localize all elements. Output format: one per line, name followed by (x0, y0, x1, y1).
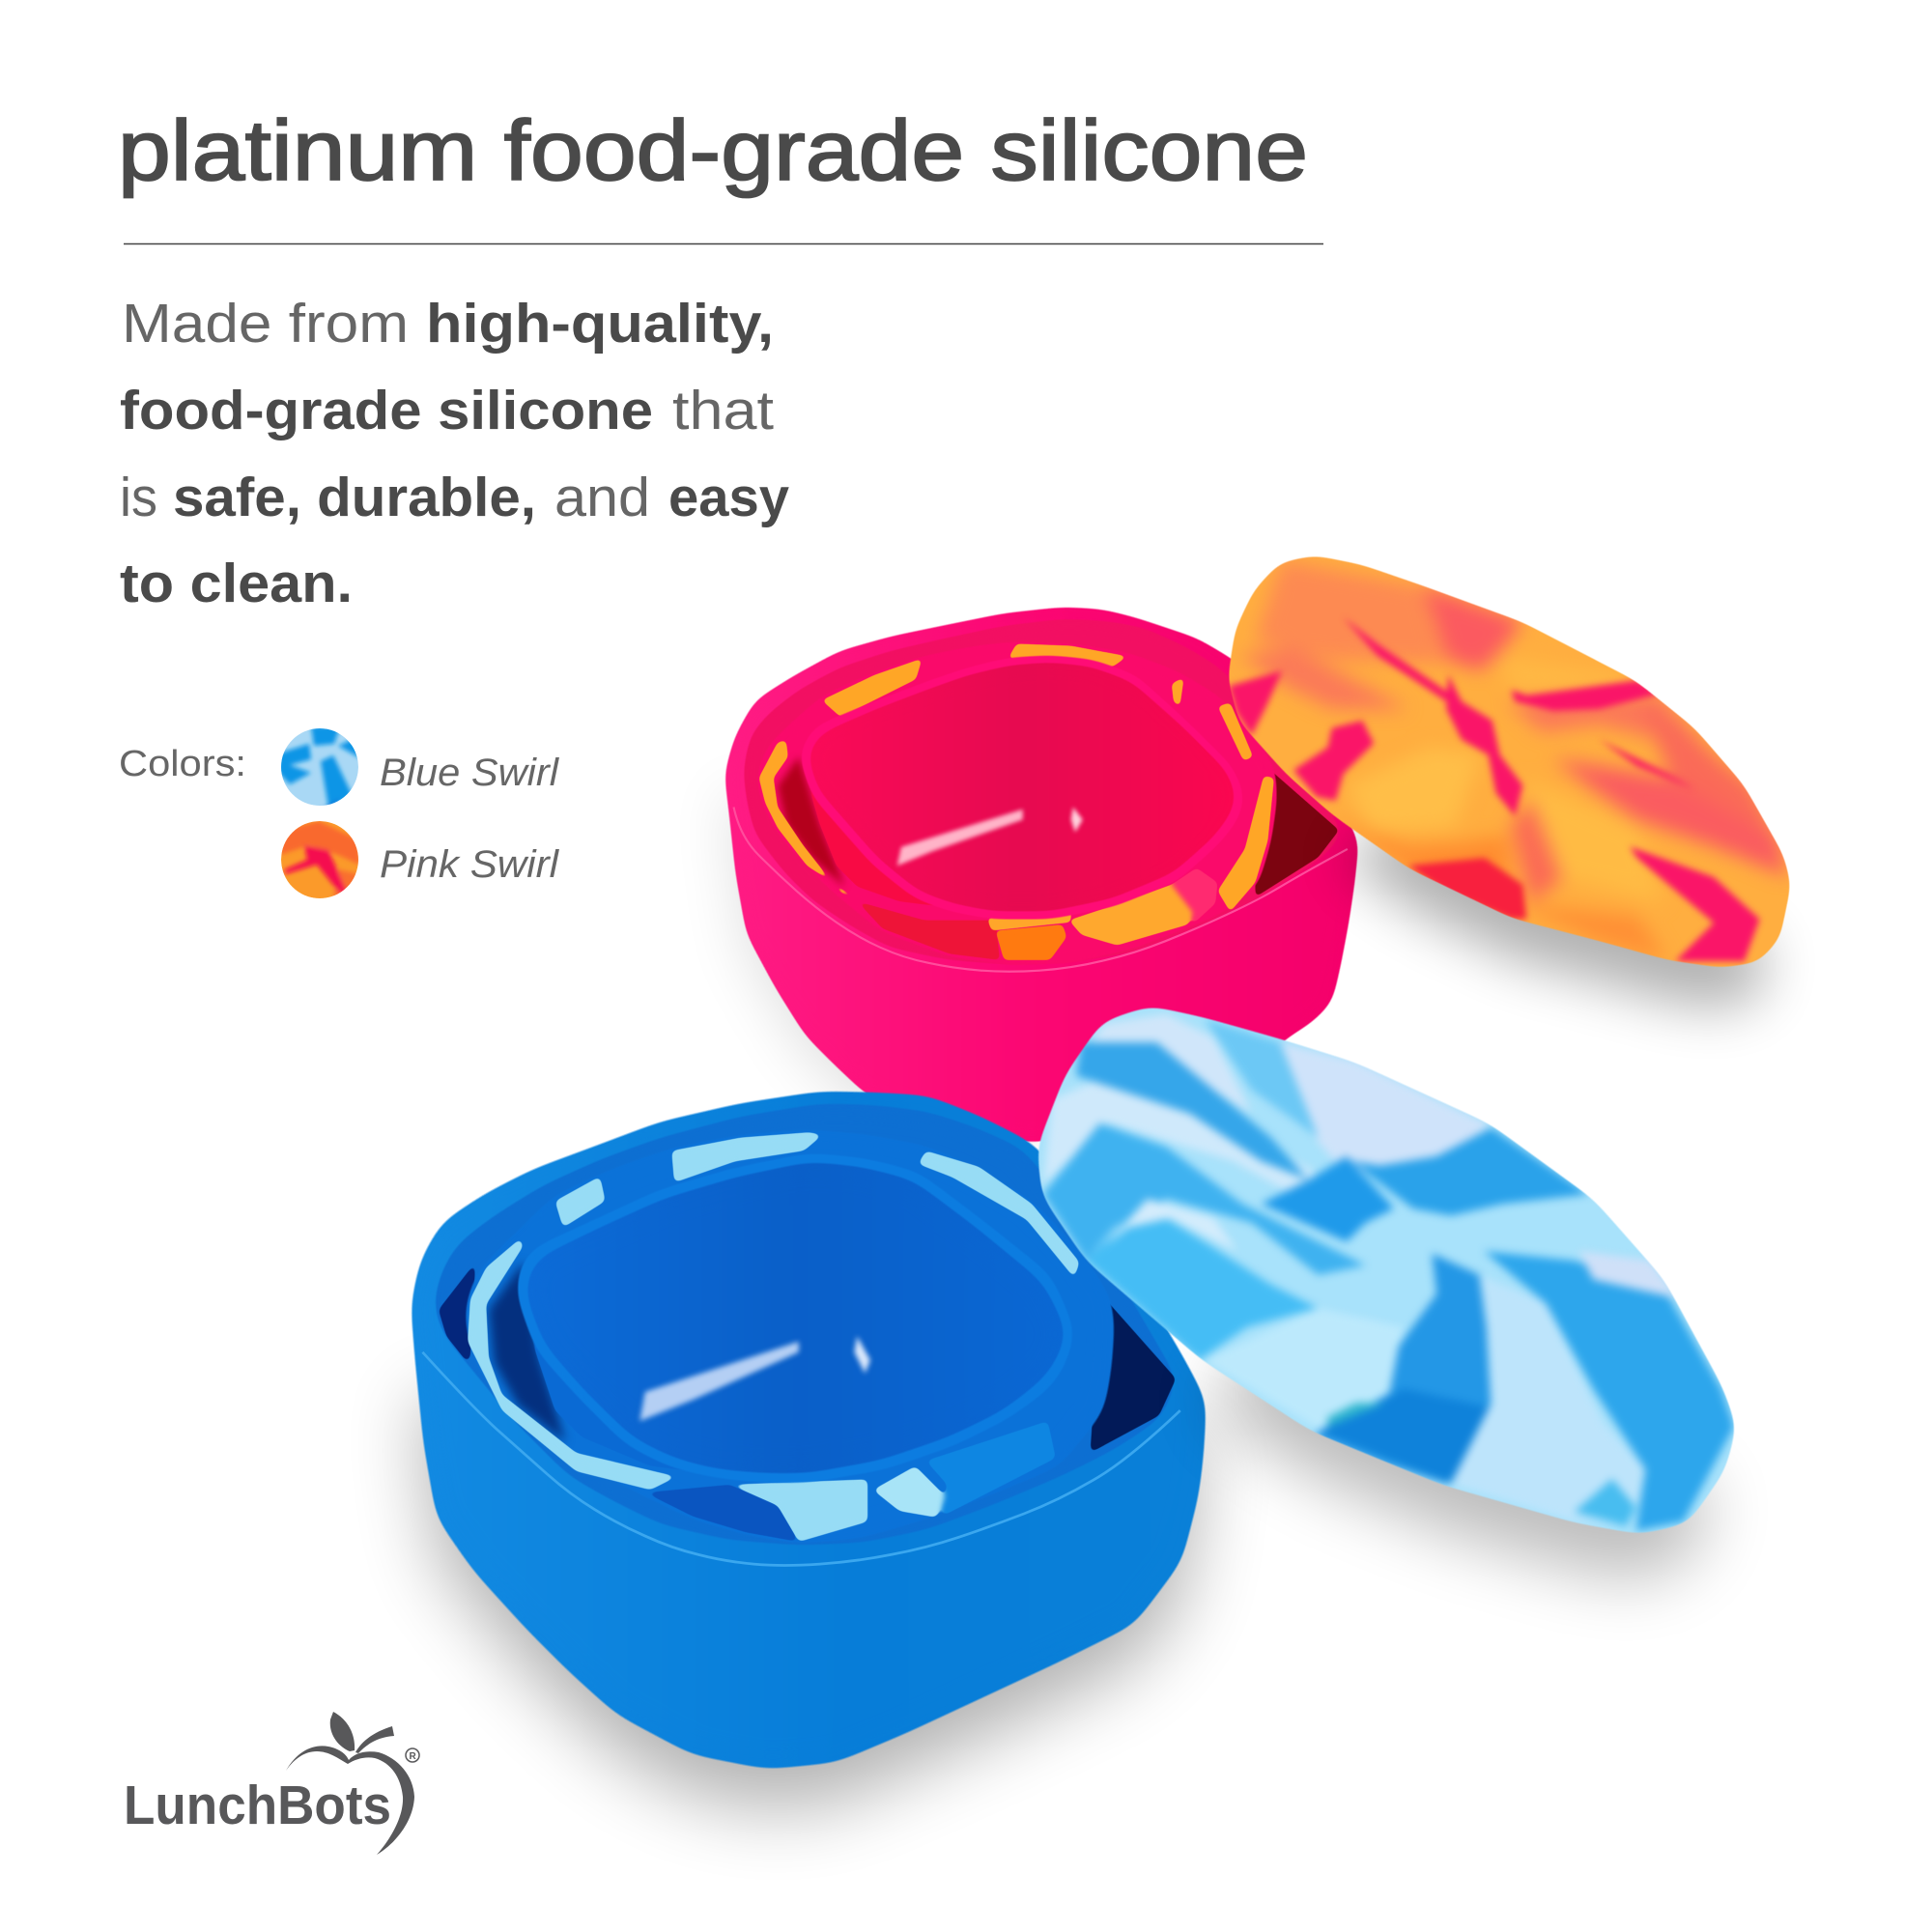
medium bowl left interior shadow (778, 756, 844, 887)
blue box shadow (417, 1389, 1204, 1809)
pink swirl lid group (1217, 549, 1798, 1009)
blue small bowl rim (512, 1149, 1080, 1487)
infographic canvas (120, 117, 1791, 1855)
colors legend (119, 726, 559, 898)
logo wordmark: LunchBots (124, 1775, 391, 1836)
blue outer container (407, 1087, 1210, 1774)
medium bowl base (753, 639, 1280, 968)
title rule (124, 243, 1323, 245)
lid right blue (1484, 1251, 1734, 1531)
line 3 (120, 467, 789, 528)
logo apple outline (286, 1746, 414, 1855)
logo stem (355, 1726, 394, 1753)
pink inner highlight (897, 810, 1023, 866)
lid soft washes (1240, 560, 1789, 961)
pink cavity (740, 615, 1348, 968)
line 3: safe, durable, (173, 467, 536, 528)
pink medium bowl (753, 639, 1280, 968)
colors label: Colors: (119, 744, 246, 784)
logo: LunchBots (124, 1712, 419, 1855)
blue lid swirl (1024, 1000, 1745, 1541)
medium front dark wall (645, 1485, 799, 1542)
pink small bowl rim (796, 652, 1248, 923)
line 2: that (672, 380, 774, 441)
front orange rim (987, 908, 1071, 930)
pink container set (722, 604, 1362, 1157)
swatch: blue swirl (281, 728, 358, 806)
pink small bowl outer wall (805, 774, 950, 908)
medium bowl base (460, 1125, 1119, 1548)
logo leaf (330, 1712, 355, 1751)
light blue swirl patches (468, 1132, 1080, 1542)
line 1: Made from (122, 293, 409, 355)
swatch: pink swirl (280, 821, 359, 898)
medium bowl left interior shadow (489, 1262, 566, 1442)
line 3: and (554, 467, 650, 528)
lid upper right blue (1351, 1128, 1588, 1215)
lid pink streaks (1229, 617, 1759, 961)
blue inner highlight (639, 1342, 799, 1421)
registered mark (406, 1748, 419, 1762)
blue swirl lid group (1024, 1000, 1745, 1579)
swatch label: blue swirl: Blue Swirl (380, 752, 559, 794)
line 2: food-grade silicone (120, 380, 653, 441)
medium bowl front wall (857, 901, 1000, 960)
ribbed tab (926, 1421, 1056, 1517)
pink outer container (722, 604, 1362, 1147)
front orange wall (996, 924, 1066, 960)
registered mark: R (410, 1751, 417, 1762)
lid upper pale (1041, 1079, 1316, 1193)
lid center pale (1205, 1308, 1404, 1432)
lid white wisp (1104, 1199, 1237, 1251)
line 3: easy (668, 467, 789, 528)
lid top light patch (1280, 1042, 1492, 1180)
blue lid shadow (1209, 1327, 1712, 1579)
blue left dark cavity (439, 1262, 475, 1363)
blue small bowl outer wall (524, 1315, 714, 1474)
pink lid shadow (1340, 812, 1767, 1009)
blue small bowl interior (521, 1157, 1071, 1477)
pink inner highlight spot (1071, 808, 1083, 833)
blue container set (407, 1087, 1210, 1809)
pink tab (1068, 867, 1217, 946)
blue cavity (429, 1099, 1182, 1549)
body text (120, 293, 789, 614)
orange swirl patches (759, 643, 1274, 912)
blue medium bowl (460, 1125, 1119, 1548)
line 4: to clean. (120, 553, 353, 614)
blue tab (873, 1421, 1056, 1518)
tab pink (1172, 867, 1217, 924)
lid top band (1076, 1042, 1309, 1180)
pink box shadow (725, 790, 1031, 1157)
lid lavender column (1451, 1275, 1645, 1526)
lid right lavender (1579, 1251, 1679, 1298)
pink small bowl interior (805, 659, 1239, 915)
lid cyan accent (1575, 1479, 1636, 1526)
line 1 (122, 293, 774, 355)
blue right dark cavity (1091, 1293, 1176, 1453)
blue inner highlight spot (854, 1336, 870, 1374)
lid teal accent (1327, 1403, 1384, 1427)
line 3: is (120, 467, 157, 528)
pink right dark cavity (1255, 756, 1339, 897)
line 1: high-quality, (426, 293, 774, 355)
tab orange (1068, 885, 1192, 946)
lid lower center blue (1314, 1254, 1492, 1484)
light tab (873, 1466, 945, 1518)
pink lid swirl (1217, 549, 1798, 977)
title: platinum food-grade silicone (118, 102, 1308, 198)
swatch label: pink swirl: Pink Swirl (380, 843, 559, 886)
lid left big blue (1043, 1123, 1366, 1275)
pink rim highlight (734, 808, 1348, 972)
blue rim highlight (422, 1352, 1180, 1566)
lid center-left blue (1262, 1156, 1394, 1241)
